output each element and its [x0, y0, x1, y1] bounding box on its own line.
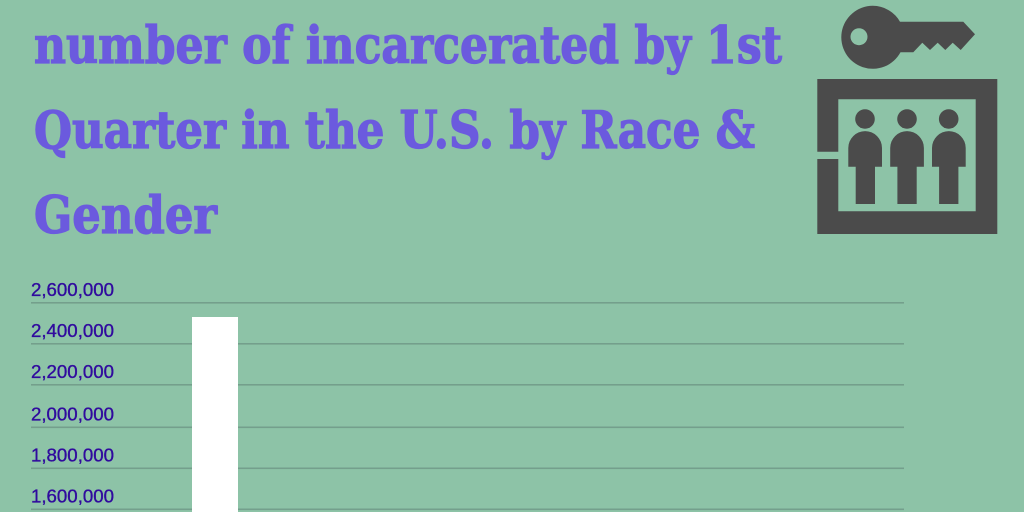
bar chart: [31, 280, 904, 512]
y-axis labels: 1,800,000: [31, 446, 114, 466]
y-axis labels: 2,400,000: [31, 321, 114, 341]
y-axis labels: 2,600,000: [31, 280, 114, 300]
icon: elevator with three people: [817, 79, 997, 234]
title: [34, 16, 782, 246]
title: Gender: [34, 186, 218, 246]
y-axis labels: 1,600,000: [31, 486, 114, 506]
y-axis labels: [31, 280, 114, 506]
y-axis labels: 2,200,000: [31, 362, 114, 382]
icon: key: [841, 6, 975, 69]
bar: [192, 317, 238, 512]
y-axis labels: 2,000,000: [31, 404, 114, 424]
title: Quarter in the U.S. by Race &: [34, 101, 755, 161]
title: number of incarcerated by 1st: [34, 16, 782, 76]
